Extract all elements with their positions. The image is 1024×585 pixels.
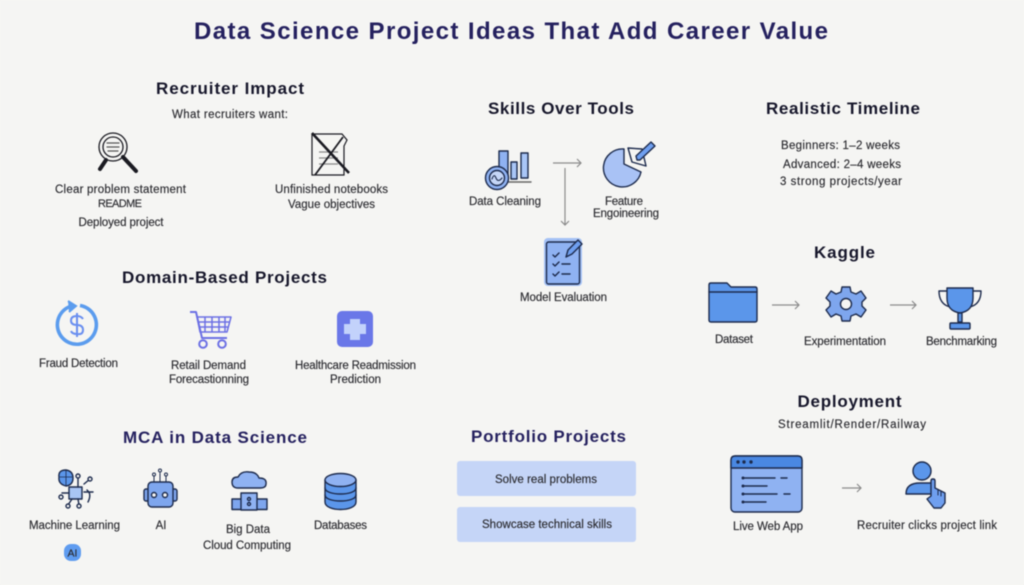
subheading: what recruiters want: What recruiters want: bbox=[172, 109, 288, 121]
label: healthcare readmission prediction bbox=[295, 360, 416, 386]
arrow: to experimentation bbox=[772, 301, 799, 309]
text: timeline list: 3 strong projects/year bbox=[780, 176, 902, 188]
arrow: to recruiter click bbox=[842, 484, 861, 492]
label: recruiter clicks project link: Recruiter clicks project link bbox=[857, 520, 997, 532]
card: showcase technical skills: Showcase technical skills bbox=[482, 519, 612, 531]
icon: trophy bbox=[939, 288, 981, 329]
text: recruiter wants: Deployed project bbox=[78, 217, 164, 229]
label: healthcare readmission prediction: Healthcare Readmission bbox=[295, 360, 416, 372]
card: solve real problems bbox=[457, 461, 636, 496]
label: AI: AI bbox=[156, 520, 166, 532]
card: showcase technical skills bbox=[457, 507, 636, 542]
text: hosting platforms: Streamlit/Render/Railway bbox=[778, 419, 926, 431]
text: recruiter wants: Clear problem statement bbox=[55, 184, 187, 196]
label: fraud detection: Fraud Detection bbox=[39, 358, 118, 370]
label: feature engineering: Engoineering bbox=[593, 208, 659, 220]
icon: cloud and servers bbox=[232, 472, 267, 510]
panel: domain-based projects bbox=[39, 268, 416, 386]
icon: crossed-out notebook bbox=[312, 133, 349, 175]
panel: recruiter impact bbox=[55, 79, 388, 229]
label: retail demand forecasting: Forecastionning bbox=[169, 374, 249, 386]
heading: deployment: Deployment bbox=[798, 392, 902, 411]
icon: data cleaning chart bbox=[486, 151, 531, 190]
label: healthcare readmission prediction: Prediction bbox=[330, 374, 381, 386]
icon: pie chart with pencil bbox=[603, 142, 655, 187]
heading: portfolio projects: Portfolio Projects bbox=[471, 427, 626, 446]
label: feature engineering bbox=[593, 196, 659, 220]
icon: magnifying glass over document bbox=[99, 133, 136, 171]
icon: web app window bbox=[731, 456, 802, 512]
heading: recruiter impact: Recruiter Impact bbox=[156, 79, 304, 98]
text: recruiter wants bbox=[55, 184, 187, 229]
label: live web app: Live Web App bbox=[733, 521, 803, 533]
heading: realistic timeline: Realistic Timeline bbox=[766, 99, 920, 118]
text: timeline list bbox=[780, 140, 902, 188]
icon: shopping cart bbox=[190, 312, 231, 348]
panel: kaggle bbox=[709, 243, 997, 348]
icon: machine learning brain and circuit bbox=[59, 470, 93, 508]
heading: skills over tools: Skills Over Tools bbox=[488, 99, 634, 118]
heading: domain-based projects: Domain-Based Projects bbox=[122, 268, 327, 287]
arrow: to benchmarking bbox=[890, 301, 916, 309]
label: databases: Databases bbox=[314, 520, 367, 532]
label: experimentation: Experimentation bbox=[804, 336, 886, 348]
panel: skills over tools bbox=[469, 99, 659, 304]
icon: recruiter clicking bbox=[906, 462, 945, 508]
label: big data and cloud computing: Cloud Computing bbox=[203, 540, 291, 552]
text: recruiter avoids bbox=[275, 184, 388, 211]
label: model evaluation: Model Evaluation bbox=[520, 292, 607, 304]
label: machine learning: Machine Learning bbox=[29, 520, 120, 532]
panel: realistic timeline bbox=[766, 99, 920, 188]
panel: mca in data science bbox=[29, 428, 367, 561]
icon: fraud detection dollar bbox=[57, 301, 96, 344]
text: recruiter avoids: Vague objectives bbox=[288, 199, 375, 211]
icon: dataset folder bbox=[709, 283, 757, 322]
icon: healthcare cross bbox=[337, 311, 373, 347]
label: dataset: Dataset bbox=[715, 334, 754, 346]
icon: model evaluation checklist bbox=[544, 238, 582, 286]
label: data cleaning: Data Cleaning bbox=[469, 196, 541, 208]
text: recruiter wants: README bbox=[98, 198, 142, 210]
arrow: to model evaluation bbox=[561, 168, 569, 225]
icon: database bbox=[325, 474, 356, 510]
label: benchmarking: Benchmarking bbox=[926, 336, 997, 348]
heading: mca in data science: MCA in Data Science bbox=[123, 428, 307, 447]
heading: kaggle: Kaggle bbox=[814, 243, 875, 262]
badge: AI: AI bbox=[68, 548, 77, 560]
label: big data and cloud computing bbox=[203, 524, 291, 552]
icon: gear bbox=[826, 287, 866, 321]
icon: robot bbox=[144, 469, 177, 507]
panel: deployment bbox=[731, 392, 997, 533]
label: retail demand forecasting bbox=[169, 360, 249, 386]
title: Data Science Project Ideas That Add Career Value bbox=[194, 18, 828, 45]
arrow: to feature engineering bbox=[553, 159, 581, 167]
text: recruiter avoids: Unfinished notebooks bbox=[275, 184, 388, 196]
label: feature engineering: Feature bbox=[605, 196, 643, 208]
badge: AI bbox=[64, 544, 81, 561]
text: timeline list: Advanced: 2–4 weeks bbox=[783, 159, 901, 171]
label: retail demand forecasting: Retail Demand bbox=[171, 360, 246, 372]
card: solve real problems: Solve real problems bbox=[495, 474, 597, 486]
label: big data and cloud computing: Big Data bbox=[226, 524, 271, 536]
panel: portfolio projects bbox=[457, 427, 636, 542]
text: timeline list: Beginners: 1–2 weeks bbox=[781, 140, 900, 152]
